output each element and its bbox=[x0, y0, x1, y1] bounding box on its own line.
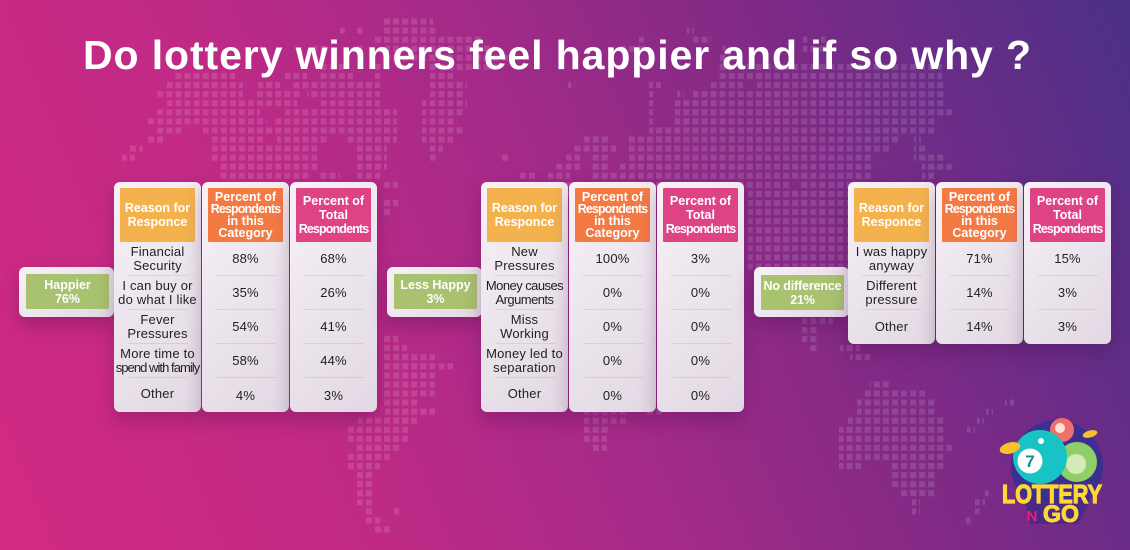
column: percent of respondents in category: 14% bbox=[966, 319, 993, 334]
category tag: no difference bbox=[754, 267, 849, 317]
title: Do lottery winners feel happier and if so why ? bbox=[83, 32, 1032, 78]
column: percent of total respondents: 0% bbox=[691, 285, 710, 300]
logo: Lottery N Go: N bbox=[1027, 508, 1037, 525]
column: reason for response bbox=[848, 182, 935, 344]
column: reason for response: spend with family bbox=[116, 360, 199, 375]
column: percent of respondents in category bbox=[202, 182, 289, 412]
logo: Lottery N Go: 7 bbox=[1025, 452, 1035, 471]
column: reason for response: Reason for bbox=[125, 201, 190, 215]
column: reason for response bbox=[114, 182, 201, 412]
column: percent of respondents in category: Category bbox=[952, 226, 1007, 240]
column: percent of total respondents: 0% bbox=[691, 319, 710, 334]
category tag: no difference: 21% bbox=[790, 292, 815, 306]
column: reason for response: Arguments bbox=[496, 292, 553, 307]
column: percent of total respondents: 26% bbox=[320, 285, 347, 300]
column: reason for response: anyway bbox=[869, 258, 914, 273]
column: reason for response: Responce bbox=[862, 215, 921, 229]
column: percent of total respondents: 0% bbox=[691, 388, 710, 403]
column: reason for response: Pressures bbox=[494, 258, 555, 273]
category tag: happier bbox=[19, 267, 114, 317]
column: percent of respondents in category: 0% bbox=[603, 353, 622, 368]
column: percent of total respondents: 41% bbox=[320, 319, 347, 334]
column: reason for response: Miss bbox=[511, 312, 538, 327]
column: reason for response: Money led to bbox=[486, 346, 563, 361]
column: percent of respondents in category: in this bbox=[961, 214, 998, 228]
column: reason for response: Other bbox=[141, 386, 174, 401]
category tag: less happy: 3% bbox=[426, 292, 445, 306]
column: percent of respondents in category: Category bbox=[585, 226, 640, 240]
category tag: happier: Happier bbox=[44, 278, 91, 292]
column: percent of respondents in category: Percent of bbox=[582, 190, 643, 204]
column: reason for response: More time to bbox=[120, 346, 195, 361]
panel: happier group bbox=[11, 182, 384, 428]
column: reason for response: separation bbox=[493, 360, 556, 375]
column: percent of respondents in category: Respondents bbox=[578, 202, 647, 216]
column: percent of total respondents: Total bbox=[1053, 208, 1082, 222]
column: reason for response: Financial bbox=[131, 244, 184, 259]
column: reason for response bbox=[481, 182, 568, 412]
column: reason for response: New bbox=[511, 244, 538, 259]
column: reason for response: Money causes bbox=[486, 278, 563, 293]
column: percent of respondents in category: Percent of bbox=[949, 190, 1010, 204]
column: percent of respondents in category: 54% bbox=[232, 319, 259, 334]
column: percent of respondents in category: 100% bbox=[595, 251, 630, 266]
category tag: less happy: Less Happy bbox=[400, 278, 471, 292]
column: percent of total respondents bbox=[1024, 182, 1111, 344]
column: percent of total respondents: Percent of bbox=[303, 194, 364, 208]
column: reason for response: I was happy bbox=[856, 244, 927, 259]
column: percent of total respondents: 15% bbox=[1054, 251, 1081, 266]
column: percent of respondents in category: 4% bbox=[236, 388, 255, 403]
column: percent of respondents in category bbox=[936, 182, 1023, 344]
column: percent of respondents in category: 0% bbox=[603, 388, 622, 403]
logo: Lottery N Go bbox=[1000, 418, 1103, 528]
column: percent of respondents in category: in this bbox=[594, 214, 631, 228]
column: reason for response: I can buy or bbox=[122, 278, 193, 293]
column: reason for response: Other bbox=[508, 386, 541, 401]
category tag: happier: 76% bbox=[55, 292, 80, 306]
column: percent of respondents in category bbox=[569, 182, 656, 412]
column: percent of respondents in category: 35% bbox=[232, 285, 259, 300]
column: percent of total respondents: 68% bbox=[320, 251, 347, 266]
column: reason for response: Working bbox=[500, 326, 549, 341]
column: percent of total respondents: Percent of bbox=[1037, 194, 1098, 208]
column: percent of respondents in category: 88% bbox=[232, 251, 259, 266]
column: percent of respondents in category: 71% bbox=[966, 251, 993, 266]
column: reason for response: Security bbox=[133, 258, 182, 273]
column: reason for response: do what I like bbox=[118, 292, 197, 307]
column: percent of total respondents bbox=[657, 182, 744, 412]
column: percent of total respondents: Respondents bbox=[666, 222, 735, 236]
column: percent of total respondents: 3% bbox=[1058, 319, 1077, 334]
column: percent of total respondents: 3% bbox=[691, 251, 710, 266]
column: percent of respondents in category: 0% bbox=[603, 285, 622, 300]
category tag: less happy bbox=[387, 267, 482, 317]
column: percent of total respondents: Respondents bbox=[299, 222, 368, 236]
column: percent of respondents in category: Percent of bbox=[215, 190, 276, 204]
column: percent of respondents in category: Respondents bbox=[211, 202, 280, 216]
column: reason for response: Reason for bbox=[859, 201, 924, 215]
column: reason for response: Fever bbox=[140, 312, 175, 327]
column: percent of respondents in category: Category bbox=[218, 226, 273, 240]
column: percent of total respondents: Total bbox=[686, 208, 715, 222]
column: percent of total respondents: 3% bbox=[324, 388, 343, 403]
column: percent of respondents in category: 58% bbox=[232, 353, 259, 368]
column: percent of respondents in category: in this bbox=[227, 214, 264, 228]
column: percent of total respondents: 44% bbox=[320, 353, 347, 368]
column: percent of total respondents bbox=[290, 182, 377, 412]
column: reason for response: Responce bbox=[495, 215, 554, 229]
column: percent of respondents in category: 0% bbox=[603, 319, 622, 334]
panel: less happy group bbox=[380, 182, 748, 428]
column: percent of total respondents: Percent of bbox=[670, 194, 731, 208]
column: percent of total respondents: 0% bbox=[691, 353, 710, 368]
column: percent of total respondents: 3% bbox=[1058, 285, 1077, 300]
logo: Lottery N Go: GO bbox=[1043, 501, 1079, 528]
panel: no difference group bbox=[751, 182, 1113, 356]
column: percent of respondents in category: Respondents bbox=[945, 202, 1014, 216]
column: percent of respondents in category: 14% bbox=[966, 285, 993, 300]
column: percent of total respondents: Total bbox=[319, 208, 348, 222]
column: reason for response: Reason for bbox=[492, 201, 557, 215]
column: percent of total respondents: Respondents bbox=[1033, 222, 1102, 236]
column: reason for response: pressure bbox=[865, 292, 918, 307]
column: reason for response: Different bbox=[866, 278, 917, 293]
column: reason for response: Responce bbox=[128, 215, 187, 229]
logo: Lottery N Go: LOTTERY bbox=[1002, 479, 1102, 509]
column: reason for response: Pressures bbox=[127, 326, 188, 341]
column: reason for response: Other bbox=[875, 319, 908, 334]
category tag: no difference: No difference bbox=[764, 278, 841, 292]
